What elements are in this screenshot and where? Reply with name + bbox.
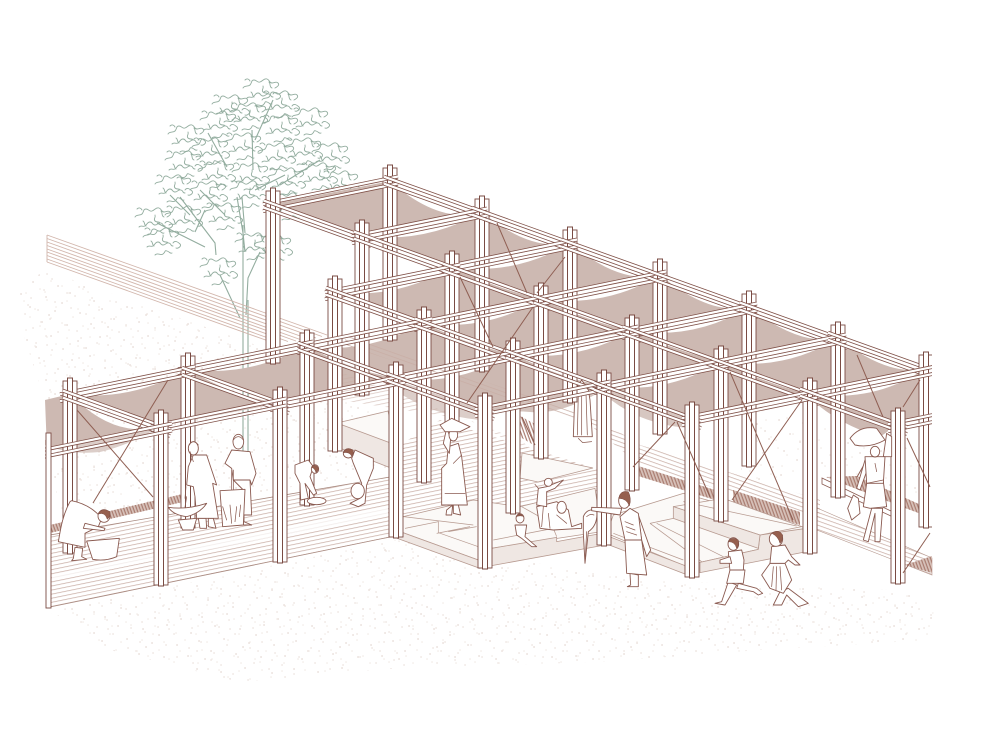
left decking [50, 477, 390, 607]
diagonal tension cables [77, 223, 930, 573]
figure: crouching woman with tray [295, 460, 326, 505]
people in left bays [58, 434, 373, 561]
axonometric illustration of open-air pavilion [20, 78, 934, 681]
brick path strip [47, 235, 327, 342]
rear decking [335, 335, 820, 520]
figure: seated child on step [515, 514, 537, 547]
stepped platforms [397, 488, 807, 574]
figure: woman carrying bundle on head [440, 418, 470, 515]
rear stepped platform [337, 411, 593, 482]
figure: kneeling girl with long hair [583, 510, 597, 563]
tree trunk and branches [157, 100, 320, 470]
right decking [817, 508, 932, 575]
figure: woman pounding at mortar [220, 434, 256, 527]
pavilion frame: posts and beams [37, 165, 1000, 608]
figure: standing woman in wrap skirt [592, 491, 651, 587]
figure: woman with bundle and bag at right [848, 428, 892, 542]
figure: running boy [715, 538, 763, 605]
hatched benches [50, 416, 932, 573]
platform: left stepped seating [397, 488, 602, 568]
platform: right stepped seating [605, 493, 807, 574]
ground stipple [18, 270, 935, 682]
figure: running girl [762, 531, 808, 607]
rear standing woman [573, 380, 592, 443]
figure: bending woman with basin [343, 449, 373, 507]
figure: woman washing at basin [58, 501, 119, 561]
tree [135, 79, 360, 470]
people at centre steps [440, 418, 808, 607]
figure: group of playing children [535, 478, 582, 530]
canopy fabric panels [45, 181, 932, 453]
figure: woman with winnowing tray [168, 442, 218, 530]
